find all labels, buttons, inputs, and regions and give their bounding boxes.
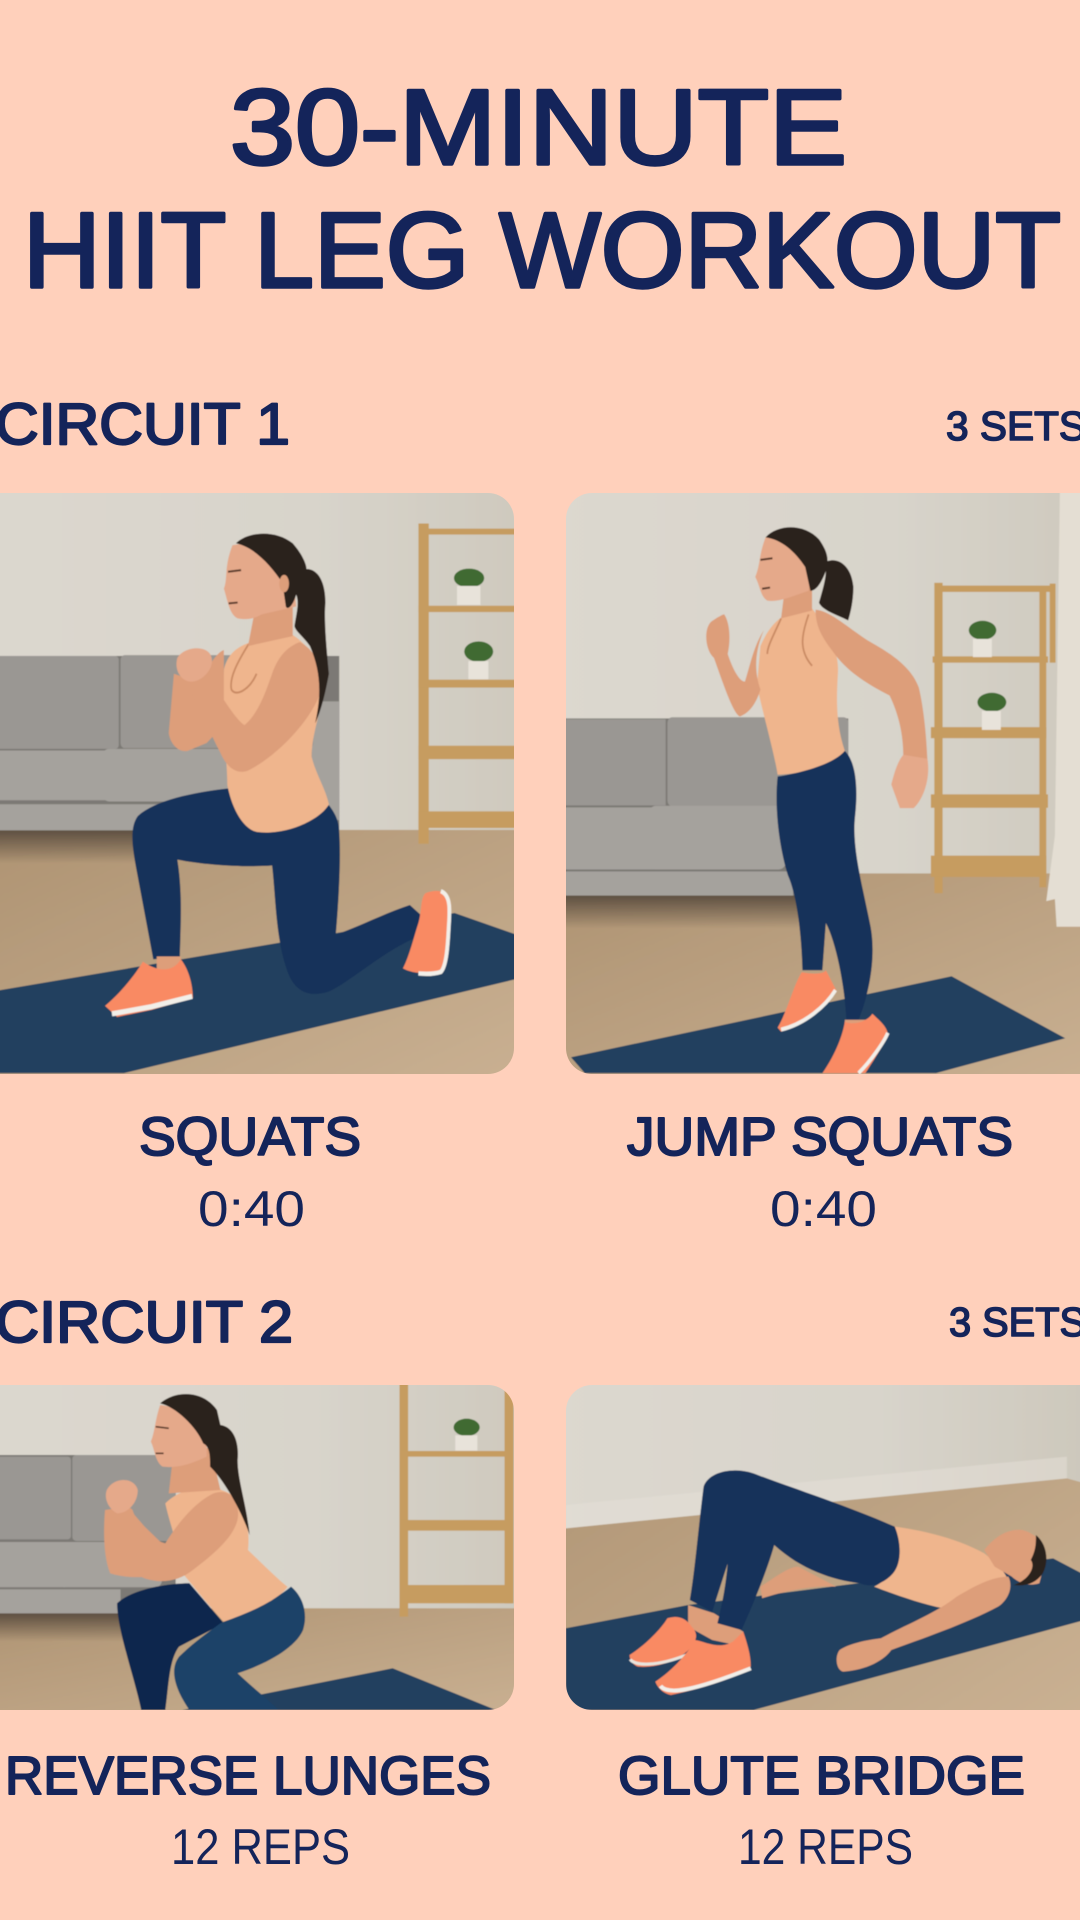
- mat: [183, 1668, 496, 1710]
- photo panel: reverse lunges: [0, 1385, 514, 1710]
- duration: squats: 0:40: [198, 1181, 305, 1237]
- duration: jump squats: 0:40: [770, 1181, 877, 1237]
- mat: [566, 1558, 1080, 1710]
- photo panel: glute bridge: [564, 1370, 1080, 1723]
- photo panel: jump squats: [564, 480, 1080, 1099]
- exercise name: reverse lunges: REVERSE LUNGES: [5, 1746, 491, 1806]
- reps: glute bridge: 12 REPS: [738, 1819, 913, 1875]
- curtain: [1046, 480, 1080, 927]
- mat: [571, 976, 1065, 1073]
- woman in reverse lunge: [104, 1394, 305, 1710]
- sofa: [564, 717, 848, 896]
- shelf: [418, 523, 517, 844]
- exercise name: glute bridge: GLUTE BRIDGE: [618, 1746, 1025, 1806]
- title: [23, 67, 1061, 310]
- title: HIIT LEG WORKOUT: [23, 190, 1061, 310]
- woman in bridge: [630, 1470, 1046, 1695]
- exercise name: jump squats: JUMP SQUATS: [627, 1107, 1013, 1167]
- shelf: [400, 1380, 514, 1617]
- woman mid jump: [706, 527, 928, 1073]
- title: 30-MINUTE: [230, 67, 847, 187]
- sofa: [0, 655, 339, 830]
- exercise name: squats: SQUATS: [139, 1107, 361, 1167]
- mat: [0, 913, 517, 1073]
- heading: circuit 1: CIRCUIT 1: [0, 392, 290, 457]
- photo panel: squats: [0, 493, 514, 1074]
- shelf: [931, 583, 1056, 893]
- heading: circuit 2: CIRCUIT 2: [0, 1290, 293, 1355]
- reps: reverse lunges: 12 REPS: [171, 1819, 350, 1875]
- woman in lunge: [105, 534, 451, 1017]
- sofa: [0, 1455, 176, 1613]
